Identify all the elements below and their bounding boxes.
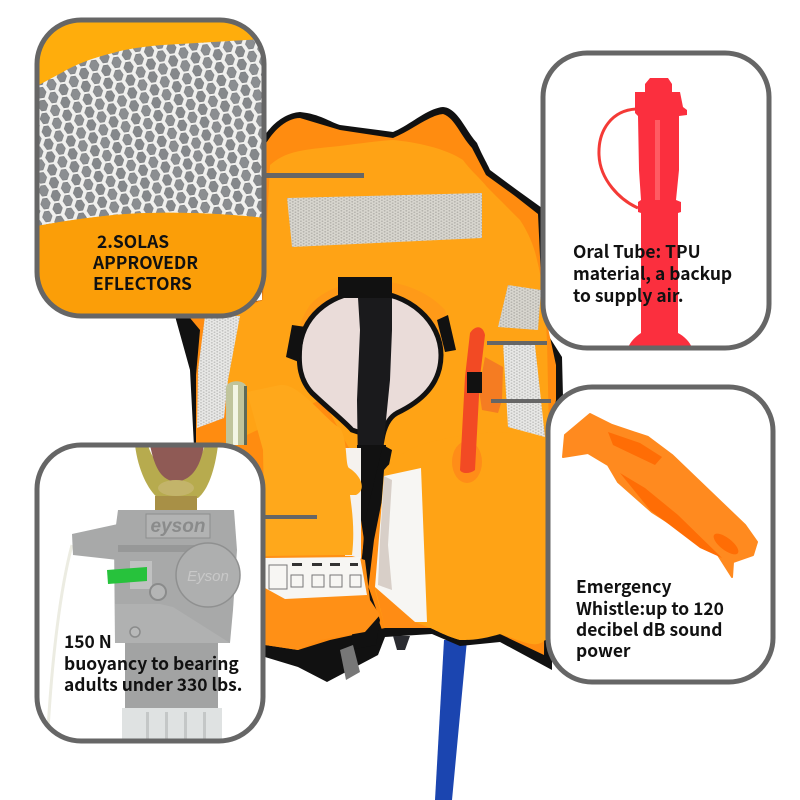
black side tab left [286,325,306,362]
clear section ribs [146,712,206,741]
whistle hole [710,530,742,558]
reflector caption: 2.SOLAS [97,229,169,254]
whistle caption: decibel dB sound [576,617,722,642]
panel border [543,53,769,348]
lower right reflector [503,343,545,437]
panel: SOLAS reflectors [37,20,264,316]
panel: whistle [548,387,773,682]
reflector caption: EFLECTORS [93,271,192,296]
collar pillow [226,140,549,644]
inflator caption: 150 N [64,629,112,654]
panel: inflator [37,445,263,741]
nozzle [72,524,118,560]
reflective honeycomb [37,39,264,226]
brass thread [155,496,197,510]
bottom black buckle [340,645,360,680]
oral tube on vest [460,327,485,473]
life jacket illustration [175,107,563,682]
lower shaded fabric [37,213,264,316]
leader line: inflator [262,515,317,519]
whistle upper slot [608,432,662,465]
right inner lower lobe [375,432,546,642]
knob [176,543,240,607]
brand plate [146,514,210,538]
lower bump [393,636,410,650]
black side tab right [437,315,456,352]
small screw [150,584,166,600]
front left bladder cover [247,385,362,556]
cord [48,545,72,730]
fitting highlight [158,480,194,496]
leader line: reflector [262,173,364,178]
body crease [118,545,200,552]
red tube [628,78,692,348]
right sticker [375,468,427,622]
orange fabric [40,22,262,226]
neck opening with black binding [299,292,441,440]
whistle on vest [479,357,503,413]
whistle caption: Whistle:up to 120 [576,596,724,621]
left lower panel [262,556,380,650]
lobe darker edge under sticker [375,587,430,628]
upper right reflector [498,285,541,330]
gray body [114,510,237,643]
knob logo: Eyson [187,568,229,585]
tube strap loop [599,109,638,208]
collar reflector [287,193,482,247]
CO2 cylinder [226,381,247,445]
fitting center [150,448,204,480]
orange whistle [563,414,757,577]
left reflector [197,316,240,428]
whistle caption: Emergency [576,574,671,599]
shade under neck [299,281,449,350]
lighter body plate [115,604,230,643]
oral tube pocket [452,441,482,483]
cylinder dark edge [244,386,247,445]
blue inflation hose [435,640,467,800]
gold fitting [135,445,218,498]
lower screw [130,627,140,637]
neck [125,640,218,712]
sticker print band [378,476,392,590]
instruction sticker [265,557,367,599]
orange back layer [190,114,556,655]
tube black clip [467,372,482,393]
panel: oral tube [543,53,769,348]
sticker pictograms [269,565,361,589]
leader line: oral tube [487,341,547,345]
crotch strap [357,298,392,470]
front zipper and black placket [350,445,386,650]
black collar tab top [338,277,392,298]
sticker figures [292,563,358,566]
zipper right half [360,445,392,630]
leader line: whistle [491,399,551,403]
tag behind cover [345,448,361,560]
reflector caption: APPROVEDR [92,250,198,275]
oral tube caption: to supply air. [573,283,684,308]
inflator caption: buoyancy to bearing [64,651,239,676]
whistle caption: power [576,638,631,663]
green latch [107,567,147,584]
oral tube caption: Oral Tube: TPU [573,239,701,264]
panel border [37,445,263,741]
panel border [548,387,773,682]
cylinder highlight [233,385,238,445]
inflator caption: adults under 330 lbs. [64,672,242,697]
whistle lower slot [620,473,722,558]
latch window [130,561,152,589]
oral tube caption: material, a backup [573,261,732,286]
vest black outline and dark back layer [175,107,563,682]
tube highlight [655,120,660,200]
clear bottom section [122,708,222,741]
panel border [37,20,264,316]
brand text: eyson [151,516,205,537]
